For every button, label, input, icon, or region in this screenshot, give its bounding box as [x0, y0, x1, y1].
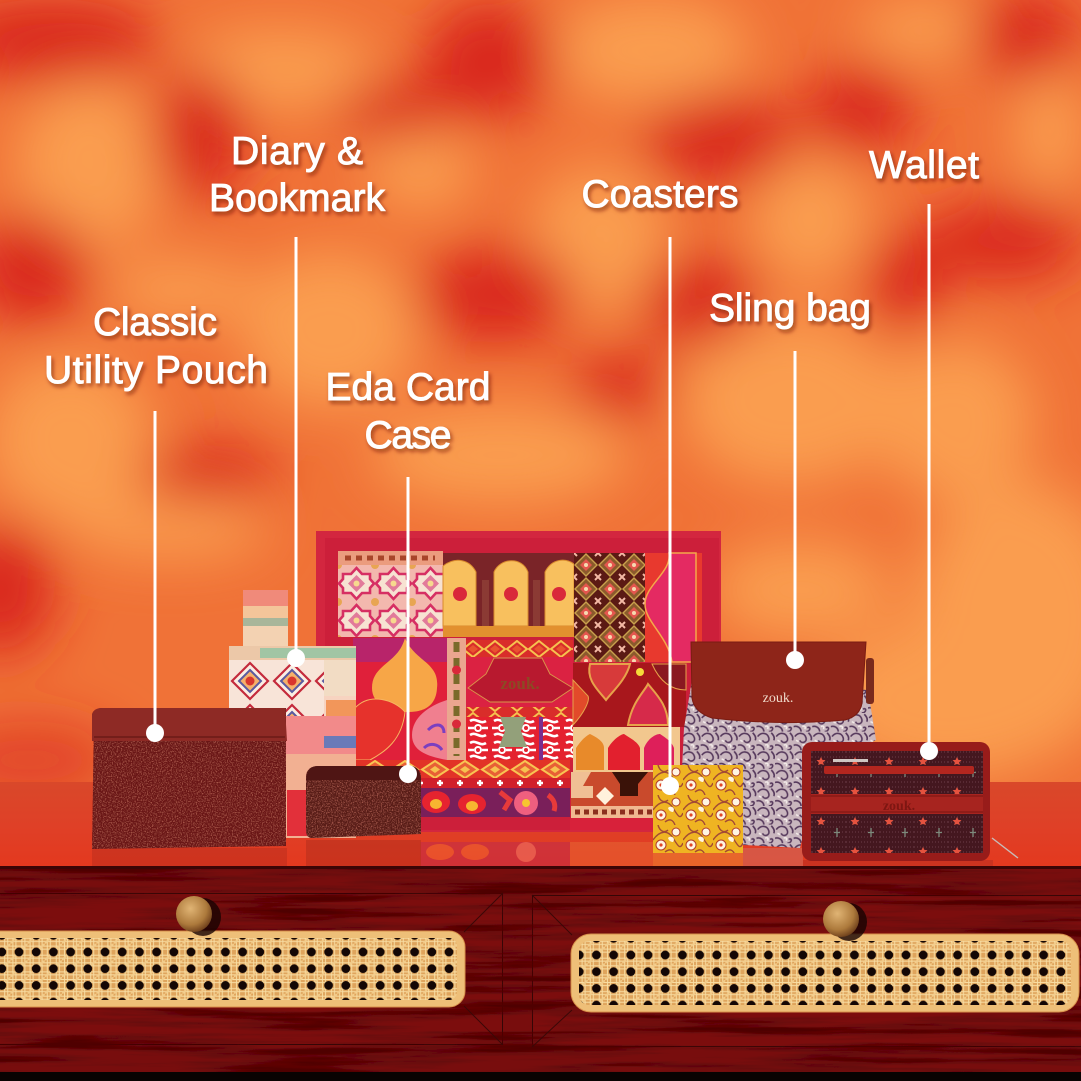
callout: Sling bag: Sling bag: [709, 287, 871, 330]
tile: dark diamonds: [574, 553, 645, 662]
table top: [0, 782, 1081, 870]
callout: Coasters: [582, 173, 738, 795]
tile: red ogee arch: [645, 553, 702, 662]
right drawer: [532, 895, 1081, 1047]
callout: Diary & Bookmark: Bookmark: [209, 177, 386, 220]
gift box: [316, 531, 721, 832]
zouk logo: zouk.: [763, 691, 793, 706]
tile: floral: [420, 788, 570, 817]
sling bag: [681, 642, 876, 848]
callout: Sling bag: [709, 287, 871, 669]
tile: yellow arches: [443, 553, 574, 637]
callout: Wallet: [869, 144, 979, 760]
tile: pink medallions: [338, 551, 443, 637]
tile: geometric kilim: [571, 772, 655, 818]
right knob: [823, 901, 867, 941]
callout: Wallet: Wallet: [869, 144, 979, 187]
dotted strip: [415, 778, 570, 788]
callout: Coasters: Coasters: [582, 173, 738, 216]
callout: Eda Card Case: Eda Card: [326, 366, 490, 409]
callout: Diary & Bookmark: [209, 130, 386, 667]
coaster: [653, 765, 743, 853]
tile: paisley: [573, 663, 686, 727]
bookmark: [243, 590, 288, 648]
border strips: [356, 760, 570, 778]
zouk label panel: [466, 640, 573, 760]
console table: [0, 866, 1081, 1081]
background: blurred orange and red wall: [0, 0, 1081, 800]
tile: large ogee pattern: [353, 638, 447, 760]
vertical floral border: [447, 638, 466, 760]
flap: [691, 642, 866, 723]
left knob: [176, 896, 221, 936]
table body: [0, 866, 1081, 1081]
callout: Classic Utility Pouch: Utility Pouch: [44, 349, 268, 392]
reflections on table: [92, 840, 993, 869]
callout: Classic Utility Pouch: Classic: [93, 301, 217, 344]
wallet: zouk.: [883, 799, 915, 814]
right cane panel: [571, 934, 1079, 1012]
callout: Eda Card Case: [326, 366, 490, 783]
zouk label panel: zouk.: [500, 674, 540, 693]
diary: [229, 646, 356, 838]
classic utility pouch: [92, 708, 287, 849]
left drawer: [0, 893, 503, 1045]
eda card case: [306, 766, 421, 838]
callout: Eda Card Case: Case: [364, 414, 452, 457]
callout: Classic Utility Pouch: [44, 301, 268, 742]
wallet: [802, 742, 1018, 861]
callout: Diary & Bookmark: Diary &: [231, 130, 363, 173]
tile: arches row: [573, 727, 680, 772]
left cane panel: [0, 931, 465, 1007]
